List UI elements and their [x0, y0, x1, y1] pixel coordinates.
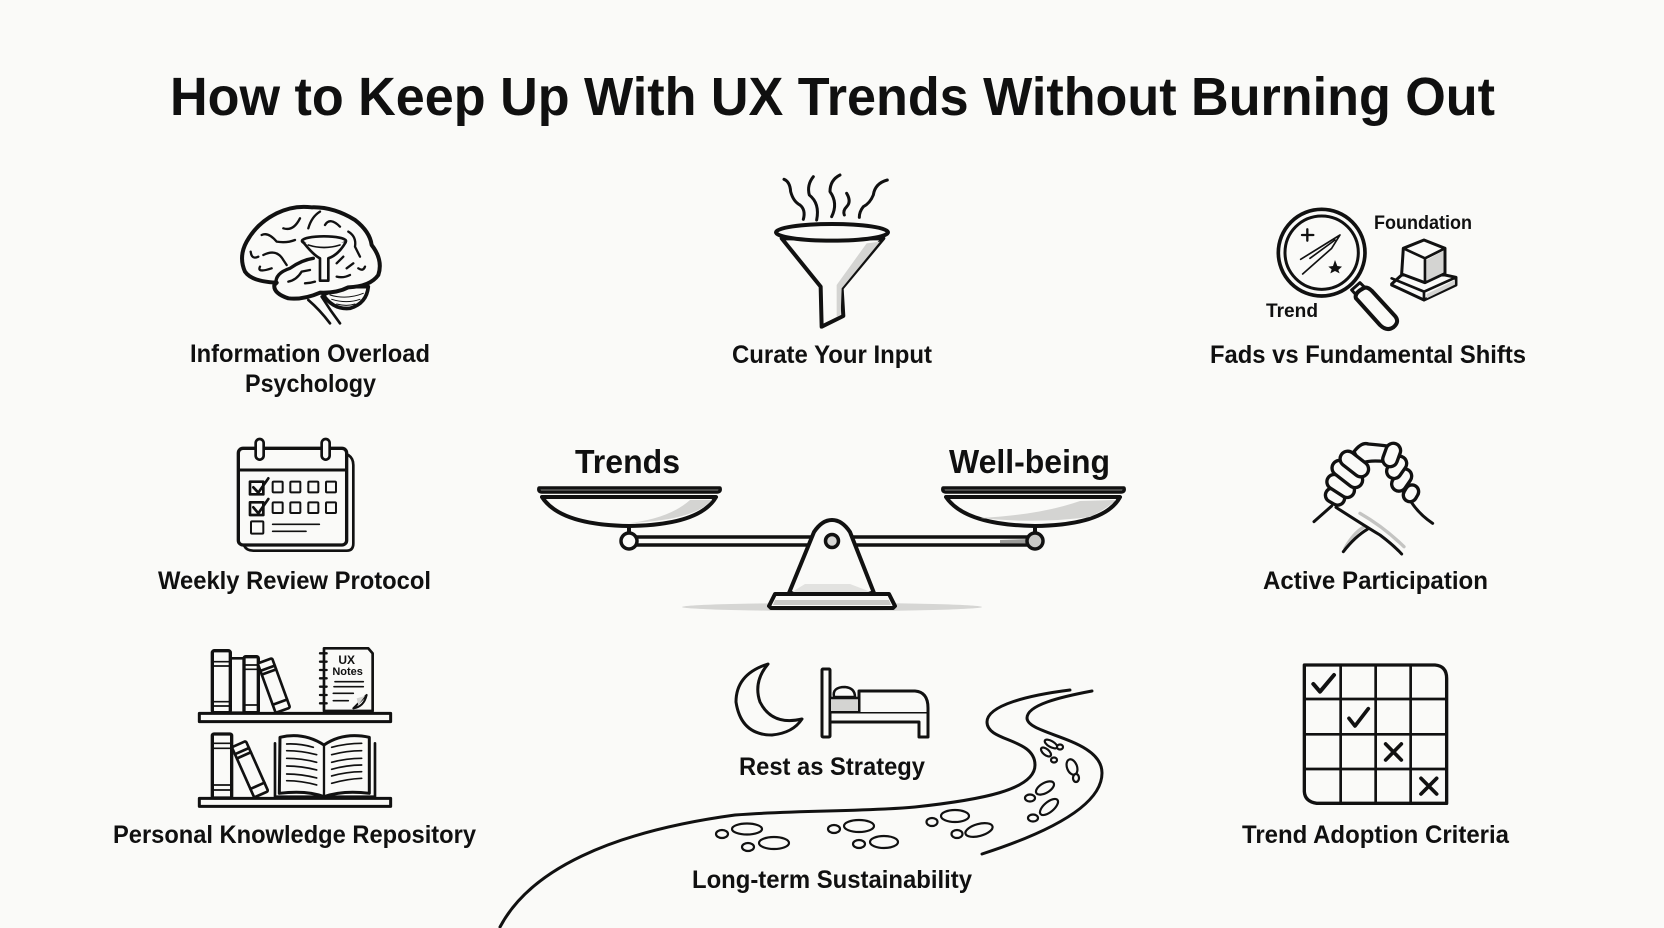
label: Active Participation [1263, 567, 1488, 595]
icon: bookshelves: UX [338, 653, 355, 667]
panel: active participation [1263, 441, 1488, 595]
icon: clasped hands [1314, 441, 1433, 554]
label: Fads vs Fundamental Shifts [1210, 341, 1526, 369]
label: trend: Trend [1266, 301, 1318, 322]
label: Long-term Sustainability [692, 866, 972, 894]
label: trends: Trends [575, 443, 680, 480]
winding path [500, 690, 1102, 927]
panel: rest as strategy [736, 664, 928, 781]
label: foundation: Foundation [1374, 213, 1472, 234]
label: Personal Knowledge Repository [113, 821, 476, 849]
panel: central balance scale [539, 443, 1124, 611]
icon: bed [822, 669, 928, 737]
icon: magnifying glass and foundation block [1278, 209, 1456, 329]
icon: bookshelves: Notes [332, 666, 363, 678]
icon: balance scale [539, 488, 1124, 608]
panel: long-term sustainability [500, 690, 1102, 927]
footprints [716, 738, 1079, 851]
icon: crescent moon [736, 664, 802, 735]
label: Rest as Strategy [739, 753, 925, 781]
panel: personal knowledge repository [113, 648, 476, 849]
icon: criteria grid [1304, 665, 1447, 803]
icon: funnel with wavy lines [776, 175, 888, 327]
title: How to Keep Up With UX Trends Without Burning Out [170, 67, 1495, 127]
label: well-being: Well-being [949, 443, 1110, 480]
panel: fads vs fundamental shifts [1210, 209, 1526, 369]
panel: trend adoption criteria [1242, 665, 1510, 849]
label [190, 340, 430, 398]
label: Information Overload [190, 340, 430, 368]
scale shadow [682, 603, 982, 611]
label: Curate Your Input [732, 341, 933, 369]
label: Weekly Review Protocol [158, 567, 431, 595]
panel: curate your input [732, 175, 933, 369]
label: Psychology [245, 370, 376, 398]
icon: bookshelves [199, 648, 391, 806]
panel: weekly review protocol [158, 439, 431, 595]
icon: calendar with checklist [238, 439, 353, 551]
panel: information overload psychology [190, 207, 430, 398]
icon: brain with funnel [242, 207, 380, 323]
label: Trend Adoption Criteria [1242, 821, 1510, 849]
